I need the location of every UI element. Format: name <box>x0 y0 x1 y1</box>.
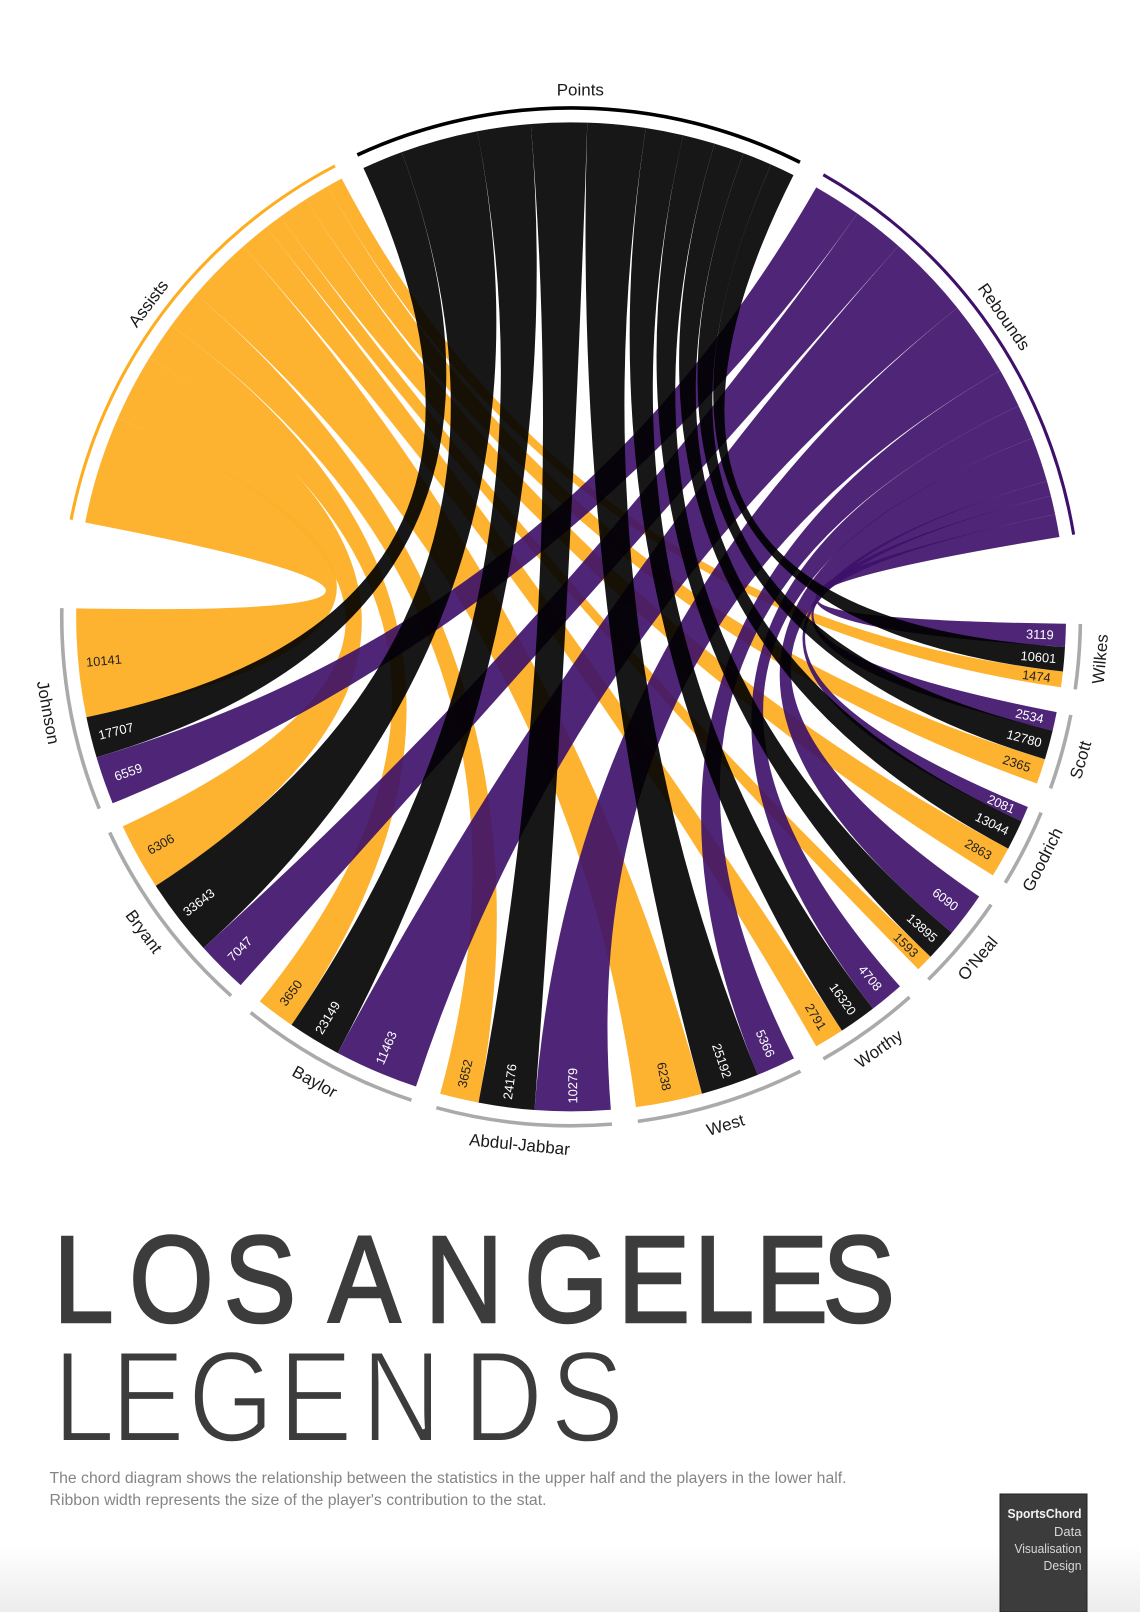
ribbon: Bryant points <box>156 131 496 948</box>
values: Scott: 12780 <box>1005 726 1043 750</box>
arc: Points <box>357 108 800 162</box>
ribbon: Wilkes assists <box>328 179 1063 687</box>
values: Johnson: 6559 <box>112 760 144 784</box>
label: Abdul-Jabbar: Abdul-Jabbar <box>468 1130 571 1159</box>
badge: SportsChord <box>1000 1494 1087 1612</box>
ribbon: Scott assists <box>306 186 1045 784</box>
arc: Goodrich <box>1005 813 1041 883</box>
values: Johnson: 10141 <box>85 652 122 670</box>
title: LEGENDS: LEGENDS <box>53 1324 624 1470</box>
description text <box>50 1470 846 1509</box>
values: Baylor: 23149 <box>312 998 343 1037</box>
values: Wilkes: 1474 <box>1021 667 1052 685</box>
arc: Worthy <box>823 997 910 1059</box>
values: West <box>654 1027 778 1092</box>
ribbon: West points <box>586 123 758 1094</box>
label: Scott: Scott <box>1066 738 1095 781</box>
arc: Rebounds <box>823 175 1074 535</box>
ribbon: Baylor rebounds <box>338 246 957 1086</box>
arc: West <box>638 1071 800 1121</box>
ribbon value labels <box>85 626 1057 1104</box>
arc: Abdul-Jabbar <box>436 1108 612 1126</box>
values: O'Neal: 1593 <box>891 930 921 960</box>
label: Rebounds: Rebounds <box>974 280 1034 354</box>
ribbon: Scott rebounds <box>811 496 1057 731</box>
values: Wilkes: 3119 <box>1026 626 1054 642</box>
label: West: West <box>704 1110 747 1140</box>
badge: SportsChord: Visualisation <box>1014 1541 1082 1556</box>
values: Bryant: 33643 <box>180 885 218 919</box>
outer arcs: statistics and players <box>62 108 1080 1126</box>
ribbons: rebounds <box>97 187 1066 1111</box>
ribbon: Worthy points <box>630 128 873 1031</box>
ribbon: Abdul-Jabbar assists <box>171 294 497 1103</box>
ribbon: Johnson rebounds <box>97 187 857 803</box>
ribbon: Wilkes rebounds <box>816 514 1066 647</box>
ribbon: Worthy rebounds <box>751 406 1033 1009</box>
label: Wilkes: Wilkes <box>1089 633 1112 685</box>
label: Baylor: Baylor <box>289 1062 341 1102</box>
values: Bryant: 7047 <box>224 934 255 964</box>
values: West: 6238 <box>654 1061 674 1092</box>
values: Wilkes <box>1020 626 1057 685</box>
arc: O'Neal <box>928 905 991 979</box>
values: Johnson <box>85 652 144 784</box>
values: Bryant <box>145 831 255 964</box>
ribbon: West rebounds <box>701 371 1019 1075</box>
values: Scott: 2365 <box>1001 752 1033 775</box>
ribbon: West assists <box>196 246 702 1107</box>
arc: Assists <box>71 166 335 520</box>
label: Assists: Assists <box>125 276 172 331</box>
label: Johnson: Johnson <box>33 679 63 746</box>
values: Baylor: 11463 <box>372 1029 400 1067</box>
badge: SportsChord: SportsChord <box>1008 1506 1082 1521</box>
ribbon: O'Neal rebounds <box>780 438 1047 933</box>
values: Wilkes: 10601 <box>1020 648 1057 666</box>
ribbon: Goodrich assists <box>280 199 1008 875</box>
label: Bryant: Bryant <box>121 906 166 957</box>
values: Worthy <box>802 962 885 1033</box>
ribbon: Baylor assists <box>149 325 407 1025</box>
badge: SportsChord: Data <box>1054 1524 1082 1539</box>
ribbons: points <box>86 122 1065 1110</box>
ribbon: Baylor points <box>291 124 537 1053</box>
values: West: 25192 <box>709 1041 735 1080</box>
ribbon: O'Neal points <box>657 135 952 957</box>
arc: Scott <box>1051 715 1071 788</box>
values: Johnson: 17707 <box>97 719 135 743</box>
ribbon: Abdul-Jabbar rebounds <box>535 308 1000 1111</box>
values: Abdul-Jabbar: 3652 <box>454 1058 476 1089</box>
values: West: 5366 <box>753 1027 778 1060</box>
arc: Wilkes <box>1075 624 1080 689</box>
chord diagram <box>33 80 1112 1159</box>
ribbon: Scott points <box>697 153 1053 759</box>
arc: Bryant <box>110 832 231 996</box>
values: Abdul-Jabbar: 10279 <box>565 1068 580 1104</box>
arc: Baylor <box>251 1013 411 1100</box>
values: Baylor: 3650 <box>276 977 305 1009</box>
ribbon: Worthy assists <box>243 227 842 1046</box>
values: Scott: 2534 <box>1014 706 1045 726</box>
values: Abdul-Jabbar <box>454 1058 580 1104</box>
group labels <box>33 80 1112 1159</box>
values: Goodrich <box>962 791 1017 863</box>
values: O'Neal: 13895 <box>904 910 940 945</box>
label: Points: Points <box>557 80 604 99</box>
label: Goodrich: Goodrich <box>1019 825 1067 895</box>
values: Goodrich: 2863 <box>962 836 995 863</box>
values: O'Neal <box>891 885 961 960</box>
ribbons: assists <box>76 179 1063 1107</box>
ribbon: Goodrich rebounds <box>802 481 1051 821</box>
badge: SportsChord: Design <box>1044 1558 1082 1573</box>
ribbon: Abdul-Jabbar points <box>479 122 587 1110</box>
label: O'Neal: O'Neal <box>954 933 1002 984</box>
values: Baylor <box>276 977 400 1067</box>
description text: Ribbon width represents the size of the player's contribution to the stat. <box>50 1492 546 1509</box>
ribbon: O'Neal assists <box>266 217 931 969</box>
values: Bryant: 6306 <box>145 831 177 858</box>
ribbon: Johnson assists <box>76 418 337 717</box>
arc: Johnson <box>62 608 99 809</box>
values: Worthy: 2791 <box>802 1001 830 1033</box>
values: Scott <box>1001 706 1045 775</box>
description text: The chord diagram shows the relationship between the statistics in the upper half and the players in the lower half. <box>50 1470 846 1487</box>
values: Abdul-Jabbar: 24176 <box>500 1063 520 1100</box>
values: Worthy: 16320 <box>826 980 859 1018</box>
ribbon: Goodrich points <box>679 144 1022 849</box>
values: Goodrich: 2081 <box>985 791 1017 817</box>
ribbon: Wilkes points <box>713 164 1065 672</box>
values: Goodrich: 13044 <box>973 809 1011 838</box>
ribbon: Bryant rebounds <box>203 214 898 985</box>
ribbon: Bryant assists <box>118 358 362 886</box>
label: Worthy: Worthy <box>852 1026 907 1072</box>
ribbon: Johnson points <box>86 152 446 757</box>
title: LOS ANGELES: LOS ANGELES <box>53 1211 895 1349</box>
values: Worthy: 4708 <box>855 962 885 994</box>
values: O'Neal: 6090 <box>930 885 961 914</box>
